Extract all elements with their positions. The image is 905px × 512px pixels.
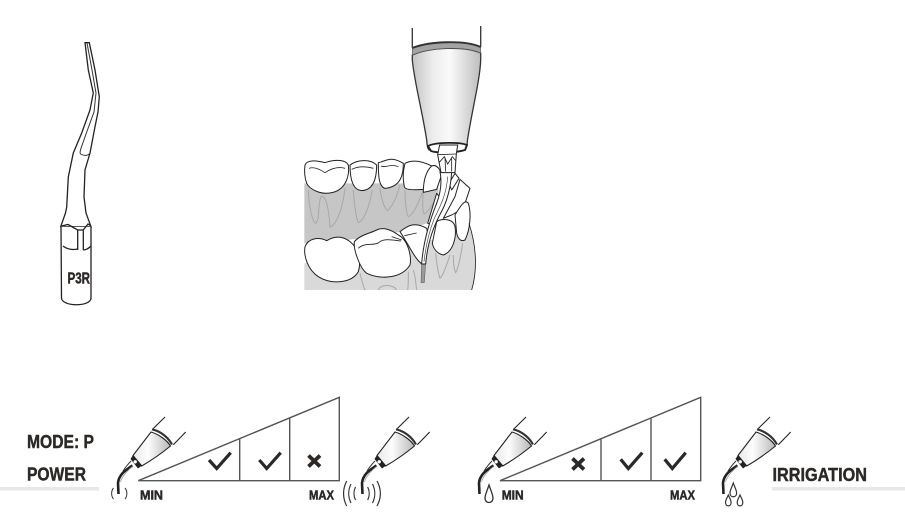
min label: MIN — [140, 487, 163, 502]
irrigation label: IRRIGATION — [772, 465, 867, 485]
divider right — [772, 487, 905, 490]
icon: handpiece minimum power — [112, 417, 186, 499]
power label: POWER — [27, 464, 86, 484]
upper teeth — [305, 159, 470, 225]
lower gum and bone — [304, 220, 476, 290]
tooth illustration: tip working on lower teeth — [304, 145, 476, 290]
ultrasonic tip P3R — [61, 43, 99, 305]
irrigation scale — [500, 397, 701, 502]
upper gum and bone — [304, 183, 438, 243]
root ghost lines — [308, 185, 463, 290]
max label: MAX — [309, 487, 334, 502]
check: high irrigation — [665, 453, 686, 468]
icon: handpiece maximum power — [344, 417, 430, 506]
scaler tip — [421, 145, 458, 283]
handpiece — [412, 26, 481, 152]
power scale — [138, 397, 339, 502]
divider left — [0, 487, 99, 490]
min label: MIN — [502, 487, 524, 502]
lower teeth — [305, 202, 470, 282]
icon: handpiece minimum irrigation — [479, 417, 547, 502]
tip label: P3R — [68, 270, 90, 287]
tooth grooves — [309, 165, 475, 290]
check: medium irrigation — [621, 453, 642, 468]
mode label: MODE: P — [27, 432, 94, 452]
cross: low irrigation — [572, 458, 584, 470]
cross: high power — [308, 456, 320, 466]
max label: MAX — [670, 487, 695, 502]
check: medium power — [259, 453, 281, 468]
check: low power — [209, 453, 231, 468]
icon: handpiece maximum irrigation — [723, 417, 791, 506]
